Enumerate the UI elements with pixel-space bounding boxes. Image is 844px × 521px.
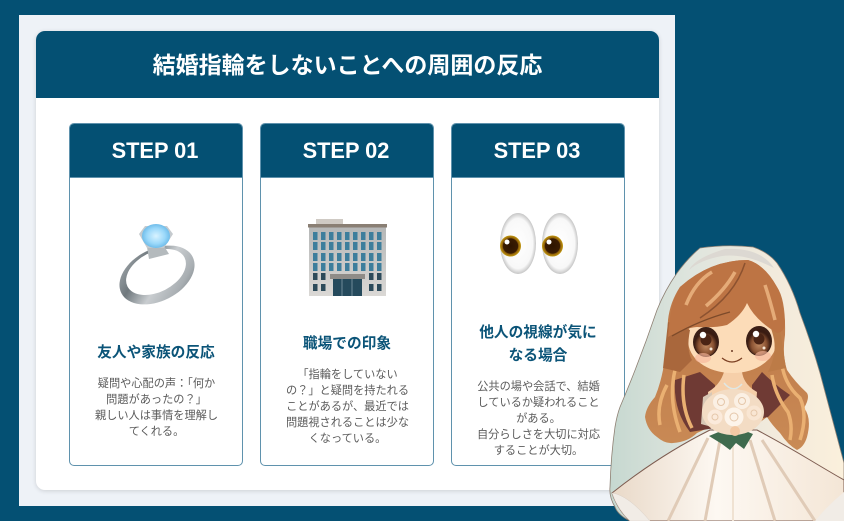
bouquet <box>702 389 764 436</box>
step 03 body text <box>477 380 600 457</box>
step 03 body text: 公共の場や会話で、結婚 <box>477 381 600 393</box>
eyes <box>693 327 719 357</box>
hair highlights <box>659 365 804 440</box>
icon: eyes <box>500 213 578 274</box>
step 02 body text: の？」と疑問を持たれる <box>286 385 409 397</box>
face <box>688 298 777 373</box>
step 03 heading: 他人の視線が気に <box>479 325 597 341</box>
dark inner hair <box>675 372 790 432</box>
step 03 heading <box>479 324 597 364</box>
illustration: bride <box>609 245 844 521</box>
step 03 header: STEP 03 <box>494 138 580 163</box>
title banner: 結婚指輪をしないことへの周囲の反応 <box>153 52 542 78</box>
side locks <box>663 322 692 372</box>
step 02 header: STEP 02 <box>303 138 389 163</box>
step 01 heading: 友人や家族の反応 <box>97 345 215 361</box>
fringe <box>668 260 785 337</box>
arm sleeves <box>701 392 712 427</box>
lace hem right <box>815 492 844 521</box>
step 03 body text: しているか疑われること <box>477 397 600 409</box>
step 01 body text: 親しい人は事情を理解し <box>95 410 218 422</box>
step 02 header <box>260 123 434 178</box>
step 03 body text: することが大切。 <box>494 445 583 457</box>
icon: ring <box>119 224 194 304</box>
step 01 header: STEP 01 <box>112 138 198 163</box>
panel: step 03 <box>451 123 625 466</box>
step 02 body text: くなっている。 <box>309 433 386 445</box>
main white card <box>36 31 659 490</box>
step 02 body text: 問題視されることは少な <box>286 417 409 429</box>
tiara <box>689 249 774 270</box>
lace hem left <box>612 493 650 521</box>
panel: step 02 <box>260 123 434 466</box>
step 01 header <box>69 123 243 178</box>
step 01 body text: てくれる。 <box>129 426 184 438</box>
leaves <box>709 426 753 450</box>
step 02 heading: 職場での印象 <box>303 336 391 352</box>
step 01 body text: 問題があったの？」 <box>106 394 207 406</box>
step 01 body text <box>95 377 218 438</box>
dress <box>612 430 844 521</box>
step 03 heading: なる場合 <box>509 348 567 364</box>
icon: office building <box>308 219 387 296</box>
panel: step 01 <box>69 123 243 466</box>
veil <box>610 246 844 521</box>
cheeks nose mouth <box>695 353 711 363</box>
step 02 body text: ことがあるが、最近では <box>286 401 409 413</box>
title banner <box>36 31 659 98</box>
step 03 header <box>451 123 625 178</box>
step 01 body text: 疑問や心配の声：「何か <box>98 378 215 390</box>
step 02 body text: 「指輪をしていない <box>297 369 398 381</box>
step 03 body text: 自分らしさを大切に対応 <box>477 429 600 441</box>
necklace <box>724 383 742 389</box>
step 03 body text: がある。 <box>516 413 561 425</box>
neck and shoulders <box>708 372 757 420</box>
outer light panel <box>19 15 675 506</box>
back hair <box>645 260 809 450</box>
step 02 body text <box>286 368 409 445</box>
